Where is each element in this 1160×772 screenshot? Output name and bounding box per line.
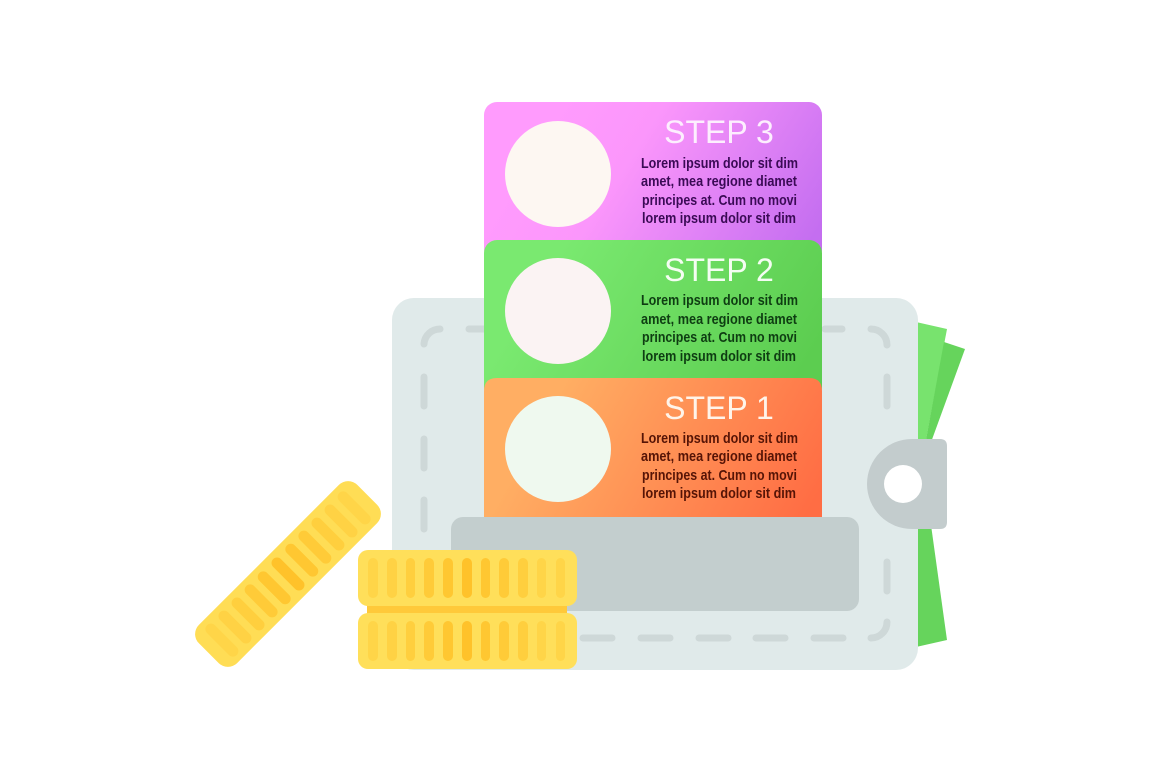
step 1 card <box>484 378 822 525</box>
step 3 icon circle <box>505 121 611 227</box>
step 2 heading: STEP 2 <box>664 252 774 288</box>
step 3 body text: lorem ipsum dolor sit dim <box>642 210 796 227</box>
step 3 body text: principes at. Cum no movi <box>642 192 797 209</box>
wallet clasp <box>867 439 947 529</box>
icon: tilted coin <box>190 476 386 672</box>
step 1 body text: lorem ipsum dolor sit dim <box>642 485 796 502</box>
step 2 body text: principes at. Cum no movi <box>642 329 797 346</box>
step 1 body text: principes at. Cum no movi <box>642 467 797 484</box>
step 2 body text: lorem ipsum dolor sit dim <box>642 348 796 365</box>
step 2 body text <box>641 292 798 365</box>
step 2 card <box>484 240 822 400</box>
wallet stitching <box>424 329 887 638</box>
step 3 heading: STEP 3 <box>664 114 774 150</box>
step 3 body text: amet, mea regione diamet <box>641 173 797 190</box>
step 3 body text <box>641 155 798 227</box>
step 2 body text: Lorem ipsum dolor sit dim <box>641 292 798 309</box>
step 1 heading: STEP 1 <box>664 390 774 426</box>
step 1 body text: amet, mea regione diamet <box>641 448 797 465</box>
step 3 body text: Lorem ipsum dolor sit dim <box>641 155 798 172</box>
step 1 body text <box>641 430 798 502</box>
icon: green banknotes behind wallet <box>916 322 965 647</box>
wallet body <box>392 298 918 670</box>
step 1 body text: Lorem ipsum dolor sit dim <box>641 430 798 447</box>
step 2 body text: amet, mea regione diamet <box>641 311 797 328</box>
icon: coin stack <box>358 550 577 669</box>
step 1 icon circle <box>505 396 611 502</box>
step 2 icon circle <box>505 258 611 364</box>
wallet front pocket <box>451 517 859 611</box>
step 3 card <box>484 102 822 262</box>
